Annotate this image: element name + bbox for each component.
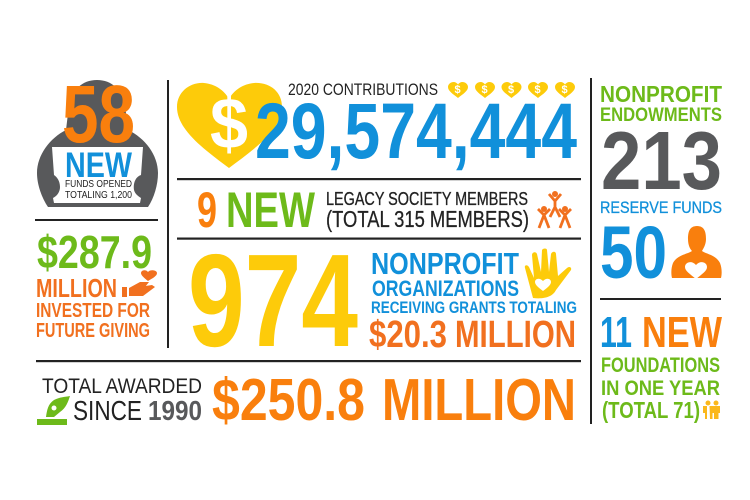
icon: big heart with dollar: [177, 83, 282, 168]
number 9: 9: [197, 182, 217, 238]
icon: big heart with dollar: $: [210, 84, 248, 164]
icon: person with heart: [671, 226, 722, 279]
label: new: NEW: [642, 308, 722, 357]
icon: gray person holding sign: [37, 80, 158, 207]
label: funds opened: FUNDS OPENED: [65, 179, 132, 190]
label: foundations: FOUNDATIONS: [601, 354, 720, 377]
icon: three people: [538, 191, 571, 228]
label: in one year: IN ONE YEAR: [601, 377, 720, 400]
panel: contributions: [177, 81, 577, 175]
number 50: 50: [600, 211, 667, 294]
panel: nonprofit organizations: [188, 227, 577, 374]
label: nonprofit: NONPROFIT: [600, 81, 723, 107]
icons: small hearts: $: [562, 84, 568, 96]
panel: new foundations: [600, 308, 722, 423]
label: future giving: FUTURE GIVING: [36, 320, 150, 342]
label: total 71: (TOTAL 71): [602, 397, 700, 423]
number 974: 974: [188, 227, 358, 374]
icons: small hearts: $: [454, 84, 461, 96]
label: organizations: ORGANIZATIONS: [372, 276, 519, 301]
label: endowments: ENDOWMENTS: [600, 105, 722, 126]
number 11: 11: [600, 308, 632, 357]
icons: small hearts: $: [482, 84, 488, 96]
amount 287.9: $287.9: [37, 226, 152, 278]
icon: yellow hand with heart: [525, 248, 571, 298]
panel: new funds: [37, 69, 158, 207]
panel: invested for future giving: [36, 226, 157, 342]
icon: hand with heart: [122, 270, 157, 297]
icons: small hearts: [448, 82, 575, 98]
label: legacy society members: LEGACY SOCIETY MEMBERS: [326, 189, 528, 209]
icon: hand casting vote: [37, 396, 70, 425]
label: total awarded: TOTAL AWARDED: [42, 375, 202, 398]
number 58: 58: [62, 69, 135, 160]
label: receiving grants totaling: RECEIVING GRANTS TOTALING: [371, 298, 577, 317]
label: new: NEW: [226, 182, 316, 238]
amount 29,574,444: 29,574,444: [255, 86, 577, 175]
label: new: NEW: [65, 146, 132, 185]
panel: legacy society: [197, 182, 571, 238]
amount 250.8: $250.8: [212, 367, 365, 433]
label: million: MILLION: [382, 367, 576, 433]
label: invested for: INVESTED FOR: [36, 300, 150, 322]
label: 2020 contributions: 2020 CONTRIBUTIONS: [288, 81, 438, 99]
panel: endowments: [600, 81, 723, 294]
label: reserve funds: RESERVE FUNDS: [600, 198, 722, 217]
label: totaling: TOTALING 1,200: [65, 190, 132, 201]
icons: small hearts: $: [534, 84, 541, 96]
amount 20.3: $20.3: [369, 314, 447, 356]
label: million: MILLION: [455, 314, 576, 356]
label: total 315 members: (TOTAL 315 MEMBERS): [326, 206, 529, 232]
label: nonprofit: NONPROFIT: [371, 246, 519, 281]
icons: small hearts: $: [508, 84, 514, 96]
icon: two people: [703, 400, 720, 419]
panel: total awarded: [37, 367, 576, 433]
label: since: SINCE: [73, 395, 142, 426]
label: 1990: 1990: [148, 395, 202, 426]
number 213: 213: [601, 114, 722, 207]
label: million: MILLION: [36, 273, 117, 303]
